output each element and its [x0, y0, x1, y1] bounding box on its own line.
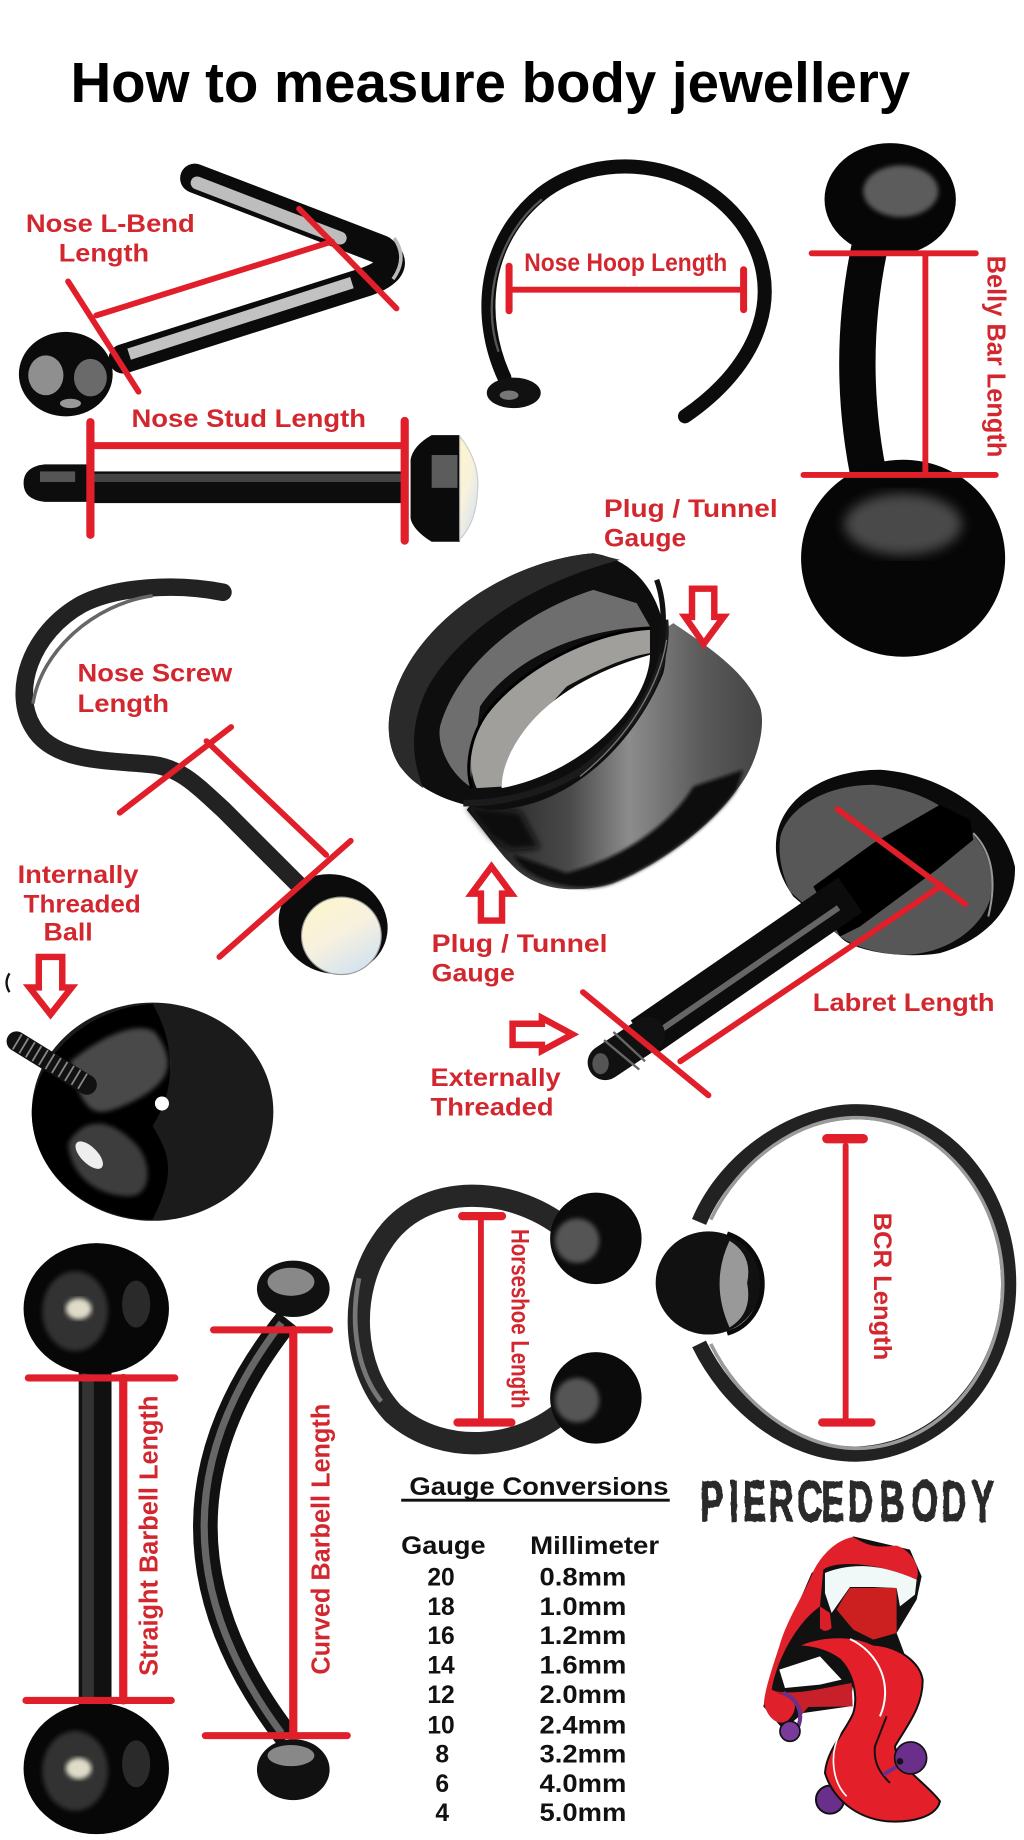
icon: stud — [24, 435, 478, 542]
label — [18, 862, 141, 947]
table: 20 — [427, 1565, 455, 1592]
label: bottom: Gauge — [432, 961, 515, 988]
icon: straight barbell — [24, 1243, 169, 1834]
arrow: right to thread — [513, 1018, 572, 1051]
measure lines — [822, 1139, 871, 1423]
label: externally threaded: Externally — [430, 1065, 561, 1092]
label: Belly Bar Length — [982, 256, 1010, 457]
label: length: Labret Length — [813, 990, 995, 1017]
label — [26, 211, 195, 268]
label — [78, 660, 233, 718]
panel: belly bar — [801, 143, 1010, 657]
measure lines — [26, 1378, 175, 1700]
measure lines — [803, 253, 996, 475]
label: externally threaded: Threaded — [430, 1094, 554, 1121]
label: Nose L-Bend — [26, 211, 195, 238]
label: Straight Barbell Length — [135, 1396, 163, 1676]
table: 2.4mm — [540, 1712, 626, 1739]
heading: Gauge Conversions — [409, 1473, 669, 1501]
label: Length — [78, 691, 169, 718]
label: Internally — [18, 862, 139, 889]
panel: internally threaded ball — [7, 862, 273, 1221]
label: Nose Stud Length — [131, 406, 366, 433]
panel: curved barbell — [204, 1261, 347, 1800]
table: 10 — [427, 1712, 455, 1739]
label: Nose Hoop Length — [524, 250, 727, 277]
title: How to measure body jewellery — [70, 51, 910, 114]
disc — [776, 770, 1015, 955]
icon: horseshoe — [355, 1193, 642, 1444]
panel: nose stud — [24, 406, 478, 542]
measure lines — [457, 1216, 511, 1423]
arrow: down to tunnel — [685, 589, 724, 644]
table: Millimeter — [530, 1533, 660, 1560]
logo: lips and tongue — [763, 1536, 940, 1822]
panel: nose L-bend — [19, 178, 401, 416]
table: Gauge — [401, 1533, 486, 1560]
panel: nose screw — [24, 587, 402, 989]
measure lines — [68, 209, 396, 392]
panel: horseshoe — [355, 1193, 642, 1444]
table: 16 — [427, 1623, 455, 1650]
label: bottom: Plug / Tunnel — [432, 931, 608, 958]
table: 8 — [435, 1742, 449, 1769]
table: 4.0mm — [540, 1771, 626, 1798]
panel: BCR — [656, 1112, 1009, 1454]
icon: hoop — [487, 166, 765, 416]
label: Curved Barbell Length — [308, 1404, 336, 1675]
table: 14 — [427, 1652, 455, 1679]
table: 1.2mm — [540, 1623, 626, 1650]
panel: nose hoop — [487, 166, 765, 416]
table: 5.0mm — [540, 1800, 626, 1827]
label: externally threaded — [430, 1065, 561, 1121]
panel: gauge conversions — [401, 1473, 670, 1827]
label: top: Plug / Tunnel — [604, 496, 778, 523]
icon: captive ring — [656, 1112, 1009, 1454]
measure lines — [205, 1330, 347, 1736]
label: Nose Screw — [78, 660, 233, 687]
table: 4 — [435, 1800, 449, 1827]
small mark — [7, 973, 9, 992]
label: BCR Length — [868, 1213, 895, 1360]
icon: L-bend stud — [19, 178, 401, 416]
label: top: Gauge — [604, 525, 686, 552]
table: 12 — [427, 1682, 455, 1709]
table: 6 — [435, 1771, 449, 1798]
label: Horseshoe Length — [505, 1229, 532, 1408]
table: 1.6mm — [540, 1652, 626, 1679]
table: 2.0mm — [540, 1682, 626, 1709]
panel: plug / tunnel — [389, 496, 778, 988]
measure lines — [120, 727, 351, 957]
label: Threaded — [24, 891, 141, 918]
icon: ball — [17, 1003, 273, 1221]
table: 1.0mm — [540, 1594, 626, 1621]
icon: tunnel — [389, 553, 762, 889]
panel: labret — [430, 770, 1015, 1121]
measure lines — [509, 266, 744, 311]
icon: belly bar — [801, 143, 1005, 657]
table: 3.2mm — [540, 1742, 626, 1769]
table: 0.8mm — [540, 1565, 626, 1592]
label: bottom — [432, 931, 608, 988]
panel: straight barbell — [24, 1243, 175, 1834]
label: top — [604, 496, 778, 552]
icon: curved barbell — [204, 1261, 330, 1800]
arrow: up to tunnel — [472, 867, 511, 921]
measure lines — [583, 809, 965, 1095]
logo: wordmark: PIERCEDBODY — [700, 1470, 994, 1534]
arrow: down to ball — [29, 957, 72, 1014]
table — [401, 1533, 660, 1827]
icon: nose screw — [24, 587, 402, 989]
table: 18 — [427, 1594, 455, 1621]
icon: labret — [592, 770, 1015, 1074]
label: Length — [59, 241, 149, 268]
measure lines — [90, 421, 405, 541]
label: Ball — [43, 920, 93, 947]
